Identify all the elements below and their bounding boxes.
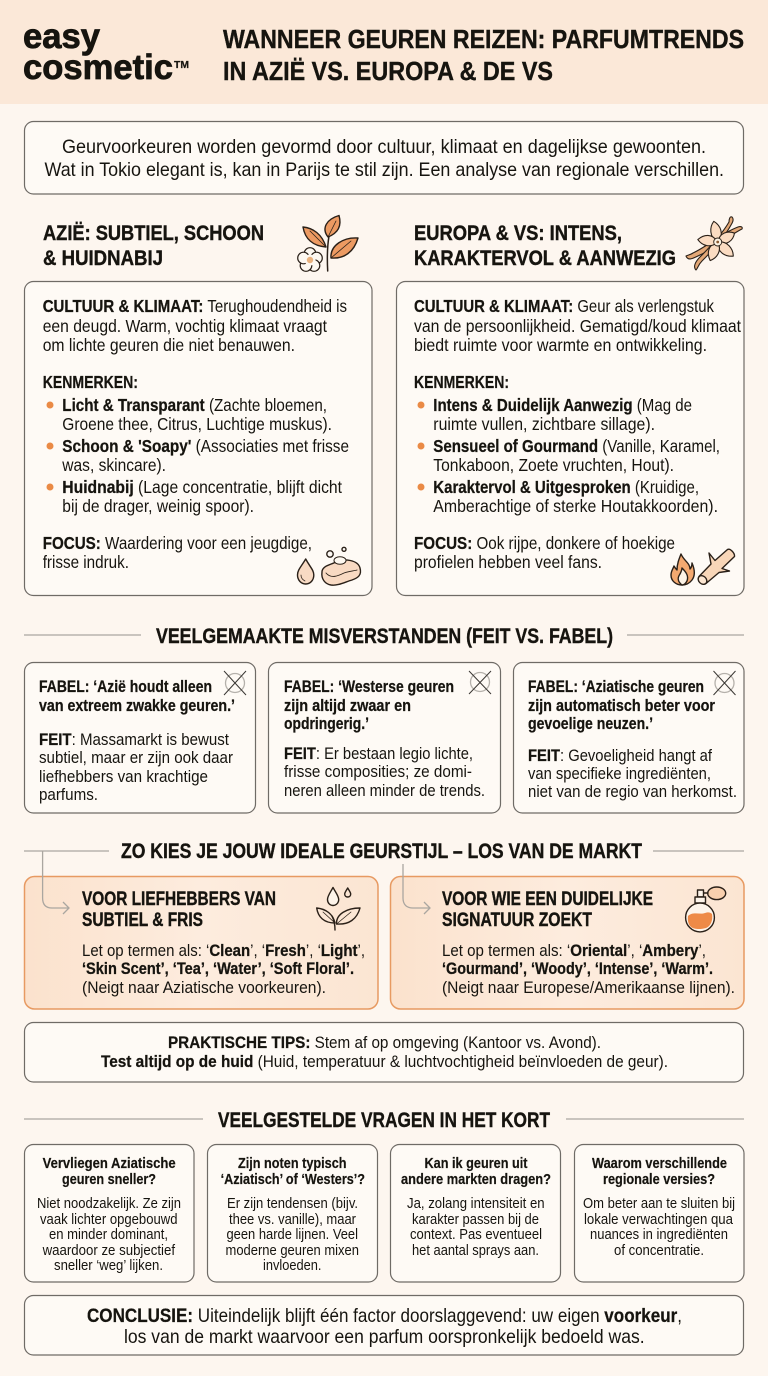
- answer: [226, 1196, 359, 1274]
- intro box: [24, 122, 744, 194]
- body text: (Neigt naar Europese/Amerikaanse lijnen).: [442, 979, 735, 997]
- answer: context. Pas eventueel: [410, 1227, 542, 1243]
- card: myth 3: [514, 662, 744, 813]
- characteristics list: was, skincare).: [61, 455, 166, 475]
- answer: karakter passen bij de: [412, 1212, 539, 1228]
- body text: [82, 942, 365, 997]
- card: myth 1: [24, 662, 256, 813]
- focus text: profielen hebben veel fans.: [414, 552, 602, 572]
- intro box: Wat in Tokio elegant is, kan in Parijs te stil zijn. Een analyse van regionale verschillen.: [44, 159, 724, 181]
- question: Waarom verschillende: [592, 1156, 727, 1172]
- body text: ‘Gourmand’, ‘Woody’, ‘Intense’, ‘Warm’.: [442, 960, 713, 978]
- heading: Azië: AZIË: SUBTIEL, SCHOON: [43, 222, 264, 245]
- answer: nuances in ingrediënten: [590, 1227, 728, 1243]
- answer: Er zijn tendensen (bijv.: [227, 1196, 358, 1212]
- arrow: to signatuur panel: [403, 864, 430, 914]
- question: andere markten dragen?: [401, 1172, 551, 1188]
- fact text: FEIT: Gevoeligheid hangt af: [528, 747, 712, 765]
- myth text: gevoelige neuzen.’: [528, 715, 653, 733]
- myth text: van extreem zwakke geuren.’: [39, 697, 235, 715]
- conclusion box: [24, 1296, 744, 1355]
- section heading: veelgestelde vragen: VEELGESTELDE VRAGEN IN HET KORT: [218, 1108, 550, 1132]
- myth text: opdringerig.’: [284, 715, 369, 733]
- card: myth 2: [268, 662, 500, 813]
- fact text: liefhebbers van krachtige: [39, 768, 208, 786]
- fact text: FEIT: Er bestaan legio lichte,: [284, 745, 473, 763]
- answer: waardoor ze subjectief: [42, 1243, 176, 1259]
- characteristics list: [414, 372, 720, 516]
- heading: [442, 889, 653, 931]
- heading: Azië: & HUIDNABIJ: [43, 247, 163, 270]
- conclusion box: CONCLUSIE: Uiteindelijk blijft één factor doorslaggevend: uw eigen voorkeur,: [87, 1305, 682, 1327]
- heading: SUBTIEL & FRIS: [82, 910, 203, 931]
- question: Vervliegen Aziatische: [43, 1156, 176, 1172]
- culture and climate text: om lichte geuren die niet benauwen.: [43, 335, 295, 355]
- fact text: frisse composities; ze domi-: [284, 763, 472, 781]
- icon: crossed circle: [714, 671, 736, 695]
- icon: wood log: [696, 549, 735, 586]
- heading: [82, 889, 276, 931]
- culture and climate text: een deugd. Warm, vochtig klimaat vraagt: [43, 316, 327, 336]
- culture and climate text: [414, 296, 741, 355]
- answer: lokale verwachtingen qua: [584, 1212, 734, 1228]
- culture and climate text: CULTUUR & KLIMAAT: Geur als verlengstuk: [414, 296, 714, 316]
- myth text: FABEL: ‘Aziatische geuren: [528, 678, 704, 696]
- myth text: [528, 678, 715, 733]
- myth text: FABEL: ‘Westerse geuren: [284, 678, 454, 696]
- icon: sprout with drops: [317, 888, 360, 930]
- answer: Om beter aan te sluiten bij: [583, 1196, 735, 1212]
- icon: flame: [671, 554, 694, 585]
- fact text: [284, 745, 485, 800]
- answer: geen harde lijnen. Veel: [226, 1227, 358, 1243]
- characteristics list: Huidnabij (Lage concentratie, blijft dicht: [62, 477, 342, 497]
- body text: ‘Skin Scent’, ‘Tea’, ‘Water’, ‘Soft Floral’.: [82, 960, 354, 978]
- title: IN AZIË VS. EUROPA & DE VS: [223, 56, 553, 86]
- card: FAQ 1: [24, 1144, 194, 1282]
- characteristics list: Karaktervol & Uitgesproken (Kruidige,: [433, 477, 699, 497]
- icon: tea leaves and flower: [298, 216, 358, 271]
- logo: easy: [23, 17, 101, 56]
- culture and climate text: van de persoonlijkheid. Gematigd/koud klimaat: [414, 316, 741, 336]
- characteristics list: Amberachtige of sterke Houtakkoorden).: [433, 496, 718, 516]
- question: [221, 1156, 365, 1188]
- question: Zijn noten typisch: [238, 1156, 346, 1172]
- icon: vanilla flower and pods: [686, 217, 742, 270]
- myth text: [284, 678, 454, 733]
- characteristics list: Schoon & 'Soapy' (Associaties met frisse: [62, 436, 349, 456]
- focus text: [414, 533, 675, 572]
- panel: Europa & VS: [396, 282, 744, 596]
- answer: [37, 1196, 181, 1274]
- question: [592, 1156, 727, 1188]
- answer: invloeden.: [263, 1258, 322, 1274]
- focus text: [43, 533, 312, 572]
- card: FAQ 3: [390, 1144, 560, 1282]
- characteristics list: bij de drager, weinig spoor).: [62, 496, 254, 516]
- heading: VOOR WIE EEN DUIDELIJKE: [442, 889, 653, 910]
- answer: en minder dominant,: [49, 1227, 168, 1243]
- panel: Azië: [24, 282, 372, 596]
- myth text: zijn altijd zwaar en: [284, 697, 411, 715]
- section heading: misverstanden: VEELGEMAAKTE MISVERSTANDEN (FEIT VS. FABEL): [156, 624, 613, 648]
- fact text: [528, 747, 737, 801]
- culture and climate text: [43, 296, 347, 355]
- heading: VOOR LIEFHEBBERS VAN: [82, 889, 276, 910]
- conclusion box: los van de markt waarvoor een parfum oorspronkelijk bedoeld was.: [124, 1326, 645, 1348]
- practical tips box: PRAKTISCHE TIPS: Stem af op omgeving (Kantoor vs. Avond).: [168, 1033, 601, 1052]
- characteristics list: ruimte vullen, zichtbare sillage).: [433, 414, 655, 434]
- answer: het aantal sprays aan.: [412, 1243, 539, 1259]
- question: Kan ik geuren uit: [424, 1156, 528, 1172]
- heading: Europa & VS: [414, 222, 676, 270]
- logo: TM: [174, 60, 189, 71]
- answer: sneller ‘weg’ lijken.: [54, 1258, 163, 1274]
- question: regionale versies?: [603, 1172, 715, 1188]
- focus text: frisse indruk.: [43, 552, 129, 572]
- intro box: Geurvoorkeuren worden gevormd door cultuur, klimaat en dagelijkse gewoonten.: [62, 136, 706, 158]
- answer: Niet noodzakelijk. Ze zijn: [37, 1196, 181, 1212]
- fact text: van specifieke ingrediënten,: [528, 765, 711, 783]
- body text: Let op termen als: ‘Clean’, ‘Fresh’, ‘Light’,: [82, 942, 365, 960]
- panel: duidelijke signatuur: [390, 876, 744, 1009]
- answer: of concentratie.: [614, 1243, 704, 1259]
- header band: [0, 0, 768, 104]
- fact text: parfums.: [39, 786, 98, 804]
- answer: thee vs. vanille), maar: [229, 1212, 356, 1228]
- body text: [442, 942, 735, 997]
- logo: cosmetic: [23, 48, 173, 87]
- answer: Ja, zolang intensiteit en: [407, 1196, 545, 1212]
- myth text: [39, 678, 235, 715]
- logo: [23, 17, 189, 87]
- myth text: zijn automatisch beter voor: [528, 697, 715, 715]
- focus text: FOCUS: Waardering voor een jeugdige,: [43, 533, 312, 553]
- card: FAQ 2: [208, 1144, 378, 1282]
- characteristics list: Groene thee, Citrus, Luchtige muskus).: [62, 414, 332, 434]
- body text: (Neigt naar Aziatische voorkeuren).: [82, 979, 326, 997]
- characteristics list: KENMERKEN:: [414, 372, 509, 392]
- fact text: FEIT: Massamarkt is bewust: [39, 731, 229, 749]
- icon: drop and soap: [298, 547, 361, 585]
- characteristics list: Tonkaboon, Zoete vruchten, Hout).: [433, 455, 674, 475]
- characteristics list: Sensueel of Gourmand (Vanille, Karamel,: [433, 436, 720, 456]
- practical tips box: Test altijd op de huid (Huid, temperatuur & luchtvochtigheid beïnvloeden de geur).: [101, 1052, 668, 1071]
- card: FAQ 4: [574, 1144, 744, 1282]
- characteristics list: Licht & Transparant (Zachte bloemen,: [62, 395, 327, 415]
- icon: perfume bottle: [686, 887, 726, 932]
- section heading: geurstijl: ZO KIES JE JOUW IDEALE GEURSTIJL – LOS VAN DE MARKT: [121, 839, 642, 863]
- characteristics list: Intens & Duidelijk Aanwezig (Mag de: [433, 395, 692, 415]
- culture and climate text: biedt ruimte voor warmte en ontwikkeling.: [414, 335, 707, 355]
- myth text: FABEL: ‘Azië houdt alleen: [39, 678, 212, 696]
- question: ‘Aziatisch’ of ‘Westers’?: [221, 1172, 365, 1188]
- answer: [407, 1196, 545, 1259]
- answer: [583, 1196, 735, 1259]
- icon: crossed circle: [224, 671, 246, 695]
- heading: Europa & VS: KARAKTERVOL & AANWEZIG: [414, 247, 676, 270]
- heading: Europa & VS: EUROPA & VS: INTENS,: [414, 222, 622, 245]
- answer: moderne geuren mixen: [226, 1243, 359, 1259]
- culture and climate text: CULTUUR & KLIMAAT: Terughoudendheid is: [43, 296, 347, 316]
- title: [223, 24, 744, 86]
- characteristics list: [43, 372, 349, 516]
- heading: SIGNATUUR ZOEKT: [442, 910, 592, 931]
- practical tips box: [24, 1022, 744, 1082]
- focus text: FOCUS: Ook rijpe, donkere of hoekige: [414, 533, 675, 553]
- fact text: [39, 731, 233, 804]
- icon: crossed circle: [469, 671, 491, 694]
- panel: subtiel en fris: [24, 876, 378, 1009]
- question: [43, 1156, 176, 1188]
- fact text: niet van de regio van herkomst.: [528, 783, 737, 801]
- answer: vaak lichter opgebouwd: [40, 1212, 178, 1228]
- characteristics list: KENMERKEN:: [43, 372, 138, 392]
- fact text: neren alleen minder de trends.: [284, 782, 485, 800]
- question: [401, 1156, 551, 1188]
- question: geuren sneller?: [62, 1172, 156, 1188]
- body text: Let op termen als: ‘Oriental’, ‘Ambery’,: [442, 942, 706, 960]
- arrow: to subtiel panel: [43, 851, 69, 914]
- heading: Azië: [43, 222, 264, 270]
- fact text: subtiel, maar er zijn ook daar: [39, 749, 233, 767]
